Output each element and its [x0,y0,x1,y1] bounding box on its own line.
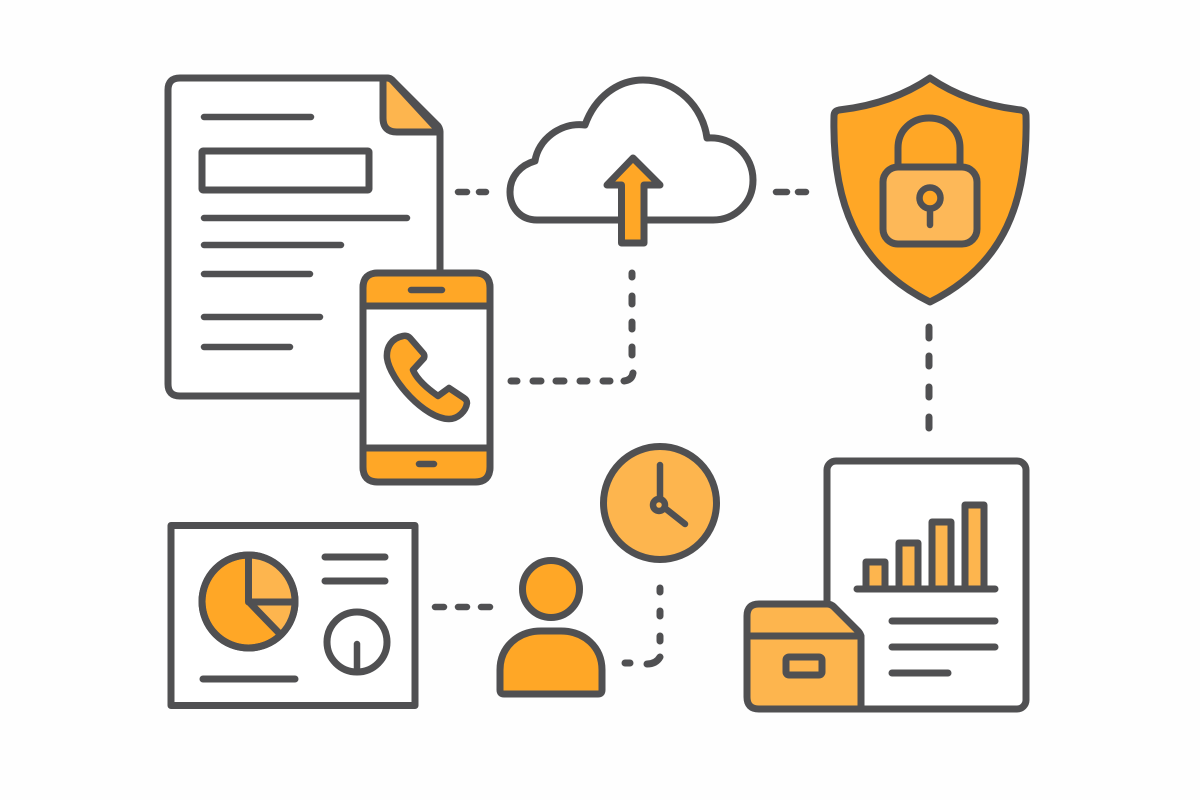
connector: shield to chart report [926,327,932,428]
connector: cloud to shield [776,189,806,195]
bar chart [857,505,995,589]
pie chart [202,555,295,648]
icon: dashboard panel [171,526,415,706]
icon: person [500,560,602,694]
icon: chart report [827,461,1026,709]
connector: person to clock [625,588,660,664]
icon: shield with padlock [834,78,1026,302]
icon: document [168,78,440,396]
icon: phone handset [387,336,467,419]
connector: phone to cloud [511,273,633,381]
icon: smartphone with call symbol [363,273,490,482]
connector: dashboard to person [435,604,490,610]
icon: upload arrow [607,158,660,243]
connector: document to cloud [458,189,486,195]
icon: clock [604,446,716,560]
gauge [327,612,387,672]
icon: cloud upload [510,80,753,243]
icon: archive box [747,604,861,709]
